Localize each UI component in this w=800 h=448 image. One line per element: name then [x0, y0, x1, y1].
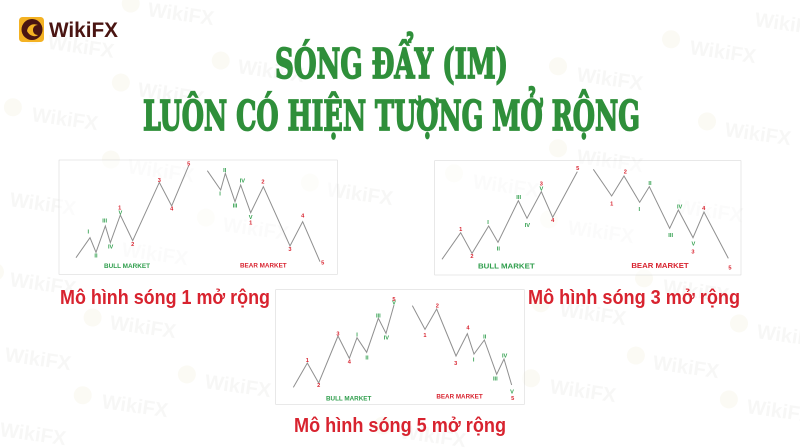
- wave labels red: 5: [728, 265, 732, 271]
- title line 1: SÓNG ĐẨY (IM): [275, 32, 508, 88]
- text: WikiFX: [661, 276, 731, 307]
- wave labels green: I: [487, 220, 489, 226]
- wave labels green: IV: [502, 353, 508, 359]
- wave labels red: 1: [306, 358, 309, 364]
- wave labels green: III: [493, 376, 498, 382]
- icon: eagle badge: [19, 17, 44, 42]
- wave labels red: 5: [576, 166, 579, 172]
- text: WikiFX: [471, 171, 541, 202]
- wave labels red: 2: [261, 179, 265, 185]
- wave labels red: [118, 161, 324, 266]
- panel: wave 3 extended chart: [435, 161, 741, 275]
- text: WikiFX: [221, 214, 291, 245]
- wave labels green: I: [356, 332, 358, 338]
- bull market wave line: [442, 172, 577, 259]
- bull market wave line: [293, 305, 394, 387]
- text: WikiFX: [146, 0, 216, 30]
- text: WikiFX: [723, 119, 793, 150]
- bear market label: BEAR MARKET: [436, 393, 483, 400]
- wave labels green: II: [94, 254, 98, 260]
- wave labels red: 2: [470, 254, 474, 260]
- bull market label: BULL MARKET: [326, 395, 371, 402]
- wave labels red: 5: [511, 396, 514, 402]
- wave labels red: 1: [118, 205, 121, 211]
- wave labels green: IV: [108, 244, 114, 250]
- text: WikiFX: [688, 37, 758, 68]
- wave labels red: 4: [551, 218, 555, 224]
- text: WikiFX: [651, 352, 721, 383]
- title: [143, 32, 640, 140]
- wave labels green: II: [365, 355, 369, 361]
- bear market wave line: [412, 306, 512, 385]
- bear market wave line: [593, 169, 728, 258]
- wave labels red: 1: [459, 227, 462, 233]
- wave labels red: 3: [454, 361, 457, 367]
- bull market label: BULL MARKET: [478, 262, 535, 271]
- wave labels green: IV: [677, 205, 683, 211]
- caption: wave 1: Mô hình sóng 1 mở rộng: [60, 287, 270, 309]
- wave labels green: II: [483, 335, 487, 341]
- wave labels green: V: [249, 215, 253, 221]
- wave labels green: III: [376, 313, 381, 319]
- wave labels red: 3: [336, 331, 340, 337]
- bear market label: BEAR MARKET: [631, 261, 689, 270]
- text: WikiFX: [558, 299, 628, 330]
- logo: WikiFX: [19, 17, 118, 42]
- text: WikiFX: [575, 64, 645, 95]
- text: WikiFX: [203, 371, 273, 402]
- wave labels red: 3: [540, 182, 543, 188]
- wave labels green: III: [102, 218, 107, 224]
- wave labels green: V: [539, 187, 543, 193]
- wave labels green: IV: [384, 336, 389, 342]
- wave labels green: II: [648, 181, 652, 187]
- wave labels green: V: [392, 301, 396, 307]
- wave labels green: I: [639, 207, 641, 213]
- panel: wave 5 extended chart: [276, 290, 524, 404]
- text: WikiFX: [8, 189, 78, 220]
- wave labels green: [356, 301, 514, 395]
- wave labels red: [459, 166, 732, 271]
- wave labels red: 2: [131, 242, 134, 248]
- wave labels green: I: [219, 191, 221, 197]
- wave labels green: III: [516, 195, 521, 201]
- text: WikiFX: [46, 32, 116, 63]
- wave labels red: 3: [691, 250, 695, 256]
- wave labels red: 1: [249, 220, 252, 226]
- text: WikiFX: [566, 217, 636, 248]
- wave labels green: V: [118, 210, 122, 216]
- wave labels green: IV: [525, 223, 530, 229]
- text: WikiFX: [108, 312, 178, 343]
- text: WikiFX: [30, 104, 100, 135]
- text: WikiFX: [548, 376, 618, 407]
- wave labels green: III: [233, 204, 238, 210]
- wave labels red: 2: [317, 383, 320, 389]
- text: WikiFX: [3, 344, 73, 375]
- wave labels red: 5: [392, 297, 396, 303]
- text: WikiFX: [325, 179, 395, 210]
- caption: wave 5: Mô hình sóng 5 mở rộng: [294, 415, 506, 437]
- wave labels red: [306, 297, 514, 402]
- text: WikiFX: [136, 79, 206, 110]
- wave labels red: 2: [436, 303, 439, 309]
- wave labels green: I: [88, 230, 90, 236]
- text: WikiFX: [8, 269, 78, 300]
- wave labels red: 3: [288, 247, 292, 253]
- wave labels red: 5: [187, 161, 190, 167]
- wave labels red: 4: [170, 207, 174, 213]
- wave labels green: V: [691, 242, 695, 248]
- bear market label: BEAR MARKET: [240, 263, 287, 270]
- wave labels green: II: [497, 246, 500, 252]
- wave labels red: 4: [702, 206, 706, 212]
- panel: wave 1 extended chart: [59, 160, 337, 274]
- bull market label: BULL MARKET: [104, 263, 150, 270]
- bear market wave line: [207, 171, 320, 262]
- text: WikiFX: [100, 391, 170, 422]
- wave labels green: [487, 181, 695, 252]
- wave labels red: 4: [348, 359, 352, 365]
- wave labels green: II: [223, 168, 227, 174]
- text: WikiFX: [126, 156, 196, 187]
- wave labels red: 1: [610, 202, 613, 208]
- brand name: WikiFX: [49, 19, 118, 42]
- wave labels red: 4: [301, 214, 305, 220]
- text: WikiFX: [675, 196, 745, 227]
- text: WikiFX: [575, 146, 645, 177]
- wave labels green: IV: [240, 179, 245, 185]
- wave labels green: [88, 168, 253, 260]
- text: WikiFX: [120, 239, 190, 270]
- wave labels red: 4: [466, 326, 470, 332]
- text: WikiFX: [236, 56, 306, 87]
- wave labels green: I: [473, 357, 475, 363]
- wave labels green: III: [668, 233, 673, 239]
- wave labels red: 3: [158, 178, 161, 184]
- wave labels red: 2: [624, 169, 627, 175]
- wave labels red: 5: [321, 260, 324, 266]
- wave labels red: 1: [423, 333, 427, 339]
- wave labels green: V: [510, 389, 514, 395]
- bull market wave line: [76, 166, 189, 258]
- caption: wave 3: Mô hình sóng 3 mở rộng: [528, 287, 740, 309]
